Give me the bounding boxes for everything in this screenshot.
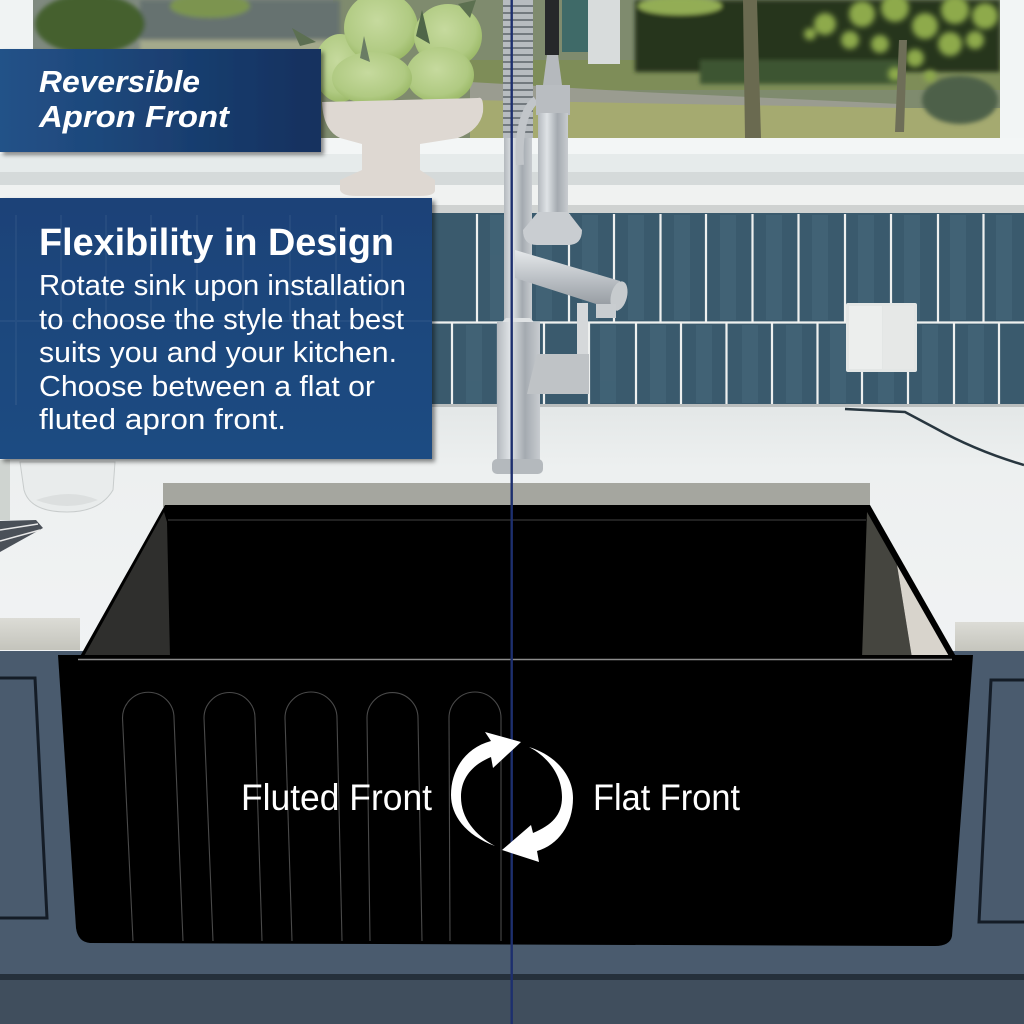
tile backsplash <box>0 213 1024 406</box>
towel and glass on counter <box>0 460 115 552</box>
sink stone lip <box>163 483 870 507</box>
description text: to choose the style that best <box>39 304 404 336</box>
faucet <box>492 0 630 474</box>
description text <box>39 270 406 436</box>
heading: reversible apron front: Reversible <box>39 64 200 99</box>
flute grooves <box>122 692 501 941</box>
hose <box>545 0 559 55</box>
description text: Rotate sink upon installation <box>39 270 406 302</box>
description text: Choose between a flat or <box>39 371 375 403</box>
panel: reversible apron front <box>0 49 321 152</box>
cabinet <box>0 651 1024 1024</box>
wall switch plate <box>846 303 917 372</box>
spout <box>515 250 620 311</box>
base <box>492 459 543 474</box>
heading: flexibility in design: Flexibility in Design <box>39 222 394 264</box>
spray head <box>543 55 562 85</box>
window view: garden outside <box>0 0 1024 140</box>
sink apron front with fluted side <box>58 655 973 946</box>
apples <box>292 0 482 104</box>
spring and column <box>503 0 533 138</box>
fruit bowl with green apples <box>292 0 483 196</box>
heading: reversible apron front <box>38 64 231 134</box>
lever handle <box>577 303 588 393</box>
label: fluted front: Fluted Front <box>241 777 433 818</box>
sink basin <box>78 505 958 660</box>
icon: rotate arrows <box>451 732 573 862</box>
description text: suits you and your kitchen. <box>39 337 397 369</box>
window frame and sill <box>0 0 1024 213</box>
arc tube <box>520 100 536 165</box>
description text: fluted apron front. <box>39 404 286 436</box>
heading: reversible apron front: Apron Front <box>38 99 231 134</box>
panel: flexibility in design <box>0 198 432 459</box>
center divider line <box>510 0 513 1024</box>
label: flat front: Flat Front <box>593 777 741 818</box>
marble bowl <box>322 98 483 196</box>
countertop <box>0 404 1024 655</box>
